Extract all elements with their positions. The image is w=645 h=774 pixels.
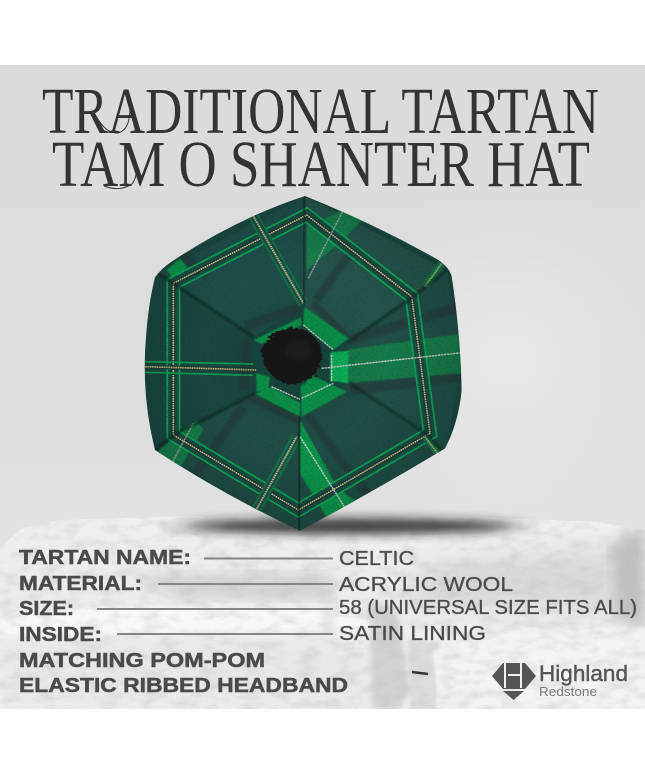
spec values: [339, 548, 637, 645]
crease shading: [155, 196, 447, 532]
Highland Redstone logo: Redstone: [539, 684, 597, 699]
bright green bars: [157, 208, 463, 523]
spec labels: INSIDE:: [19, 624, 102, 646]
tartan hat: [144, 196, 462, 531]
pom-pom: [262, 327, 322, 384]
spec labels: MATERIAL:: [19, 573, 142, 595]
hat panel tints: [143, 196, 463, 532]
spec labels: [19, 547, 348, 697]
spec labels: SIZE:: [19, 598, 74, 620]
outer tartan band: [173, 215, 430, 510]
spec values: 58 (UNIVERSAL SIZE FITS ALL): [339, 597, 637, 619]
cross stripes: [145, 210, 462, 518]
title: [42, 75, 599, 201]
Highland Redstone logo: Highland: [539, 661, 628, 686]
twill weave texture: [144, 200, 462, 518]
spec values: SATIN LINING: [339, 623, 486, 645]
Highland Redstone logo: [492, 661, 628, 700]
spec labels: MATCHING POM-POM: [19, 650, 265, 672]
stone plinth: [0, 510, 645, 710]
spec lines: [97, 558, 333, 634]
dark tartan bars: [180, 253, 460, 503]
spec values: CELTIC: [339, 548, 414, 570]
spec labels: TARTAN NAME:: [19, 547, 191, 569]
hat shadow: [182, 518, 518, 534]
spec labels: ELASTIC RIBBED HEADBAND: [19, 675, 348, 697]
spec values: ACRYLIC WOOL: [339, 574, 513, 596]
